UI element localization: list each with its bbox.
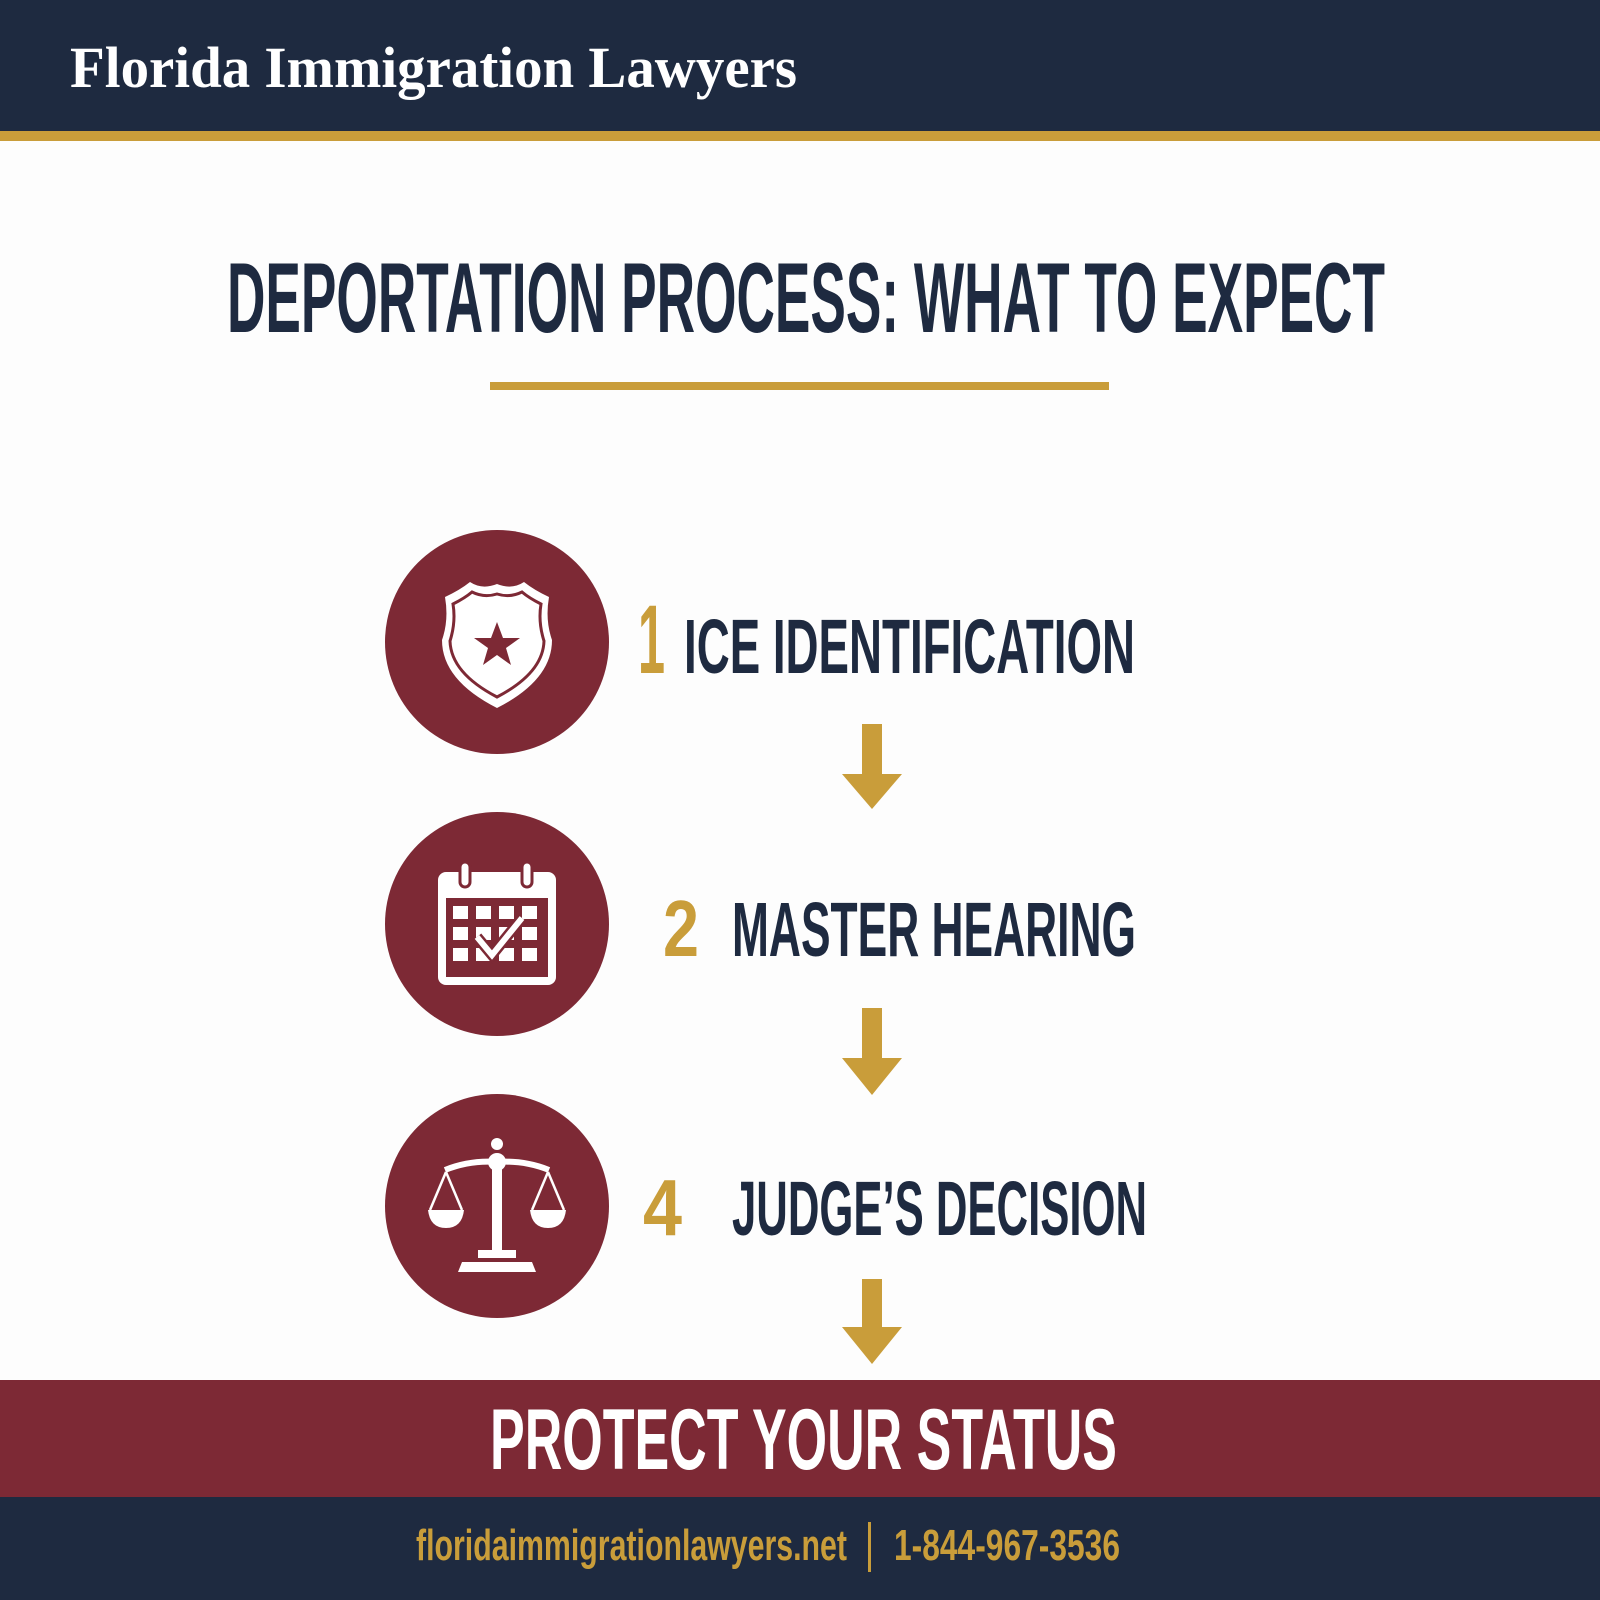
- step number 4: 4: [643, 1163, 682, 1252]
- step 1: [385, 530, 1135, 754]
- phone: 1-844-967-3536: [894, 1521, 1120, 1570]
- call-to-action banner: [0, 1380, 1600, 1497]
- footer contact bar: [0, 1497, 1600, 1600]
- arrow 3: [842, 1279, 902, 1364]
- step number 1: 1: [638, 585, 665, 694]
- step number 2: 2: [663, 884, 699, 973]
- step label: ICE IDENTIFICATION: [684, 604, 1135, 690]
- call-to-action banner: PROTECT YOUR STATUS: [490, 1392, 1117, 1488]
- icon: calendar: [385, 812, 609, 1036]
- header bar: [0, 0, 1600, 141]
- title underline: [490, 382, 1109, 390]
- icon: scales of justice: [385, 1094, 609, 1318]
- website: floridaimmigrationlawyers.net: [416, 1521, 847, 1570]
- arrow 1: [842, 724, 902, 809]
- step label: JUDGE’S DECISION: [732, 1166, 1147, 1252]
- icon: shield badge: [385, 530, 609, 754]
- step label: MASTER HEARING: [732, 887, 1136, 973]
- step 2: [385, 812, 1136, 1036]
- header brand text: Florida Immigration Lawyers: [70, 35, 797, 100]
- arrow 2: [842, 1008, 902, 1095]
- step 4: [385, 1094, 1147, 1318]
